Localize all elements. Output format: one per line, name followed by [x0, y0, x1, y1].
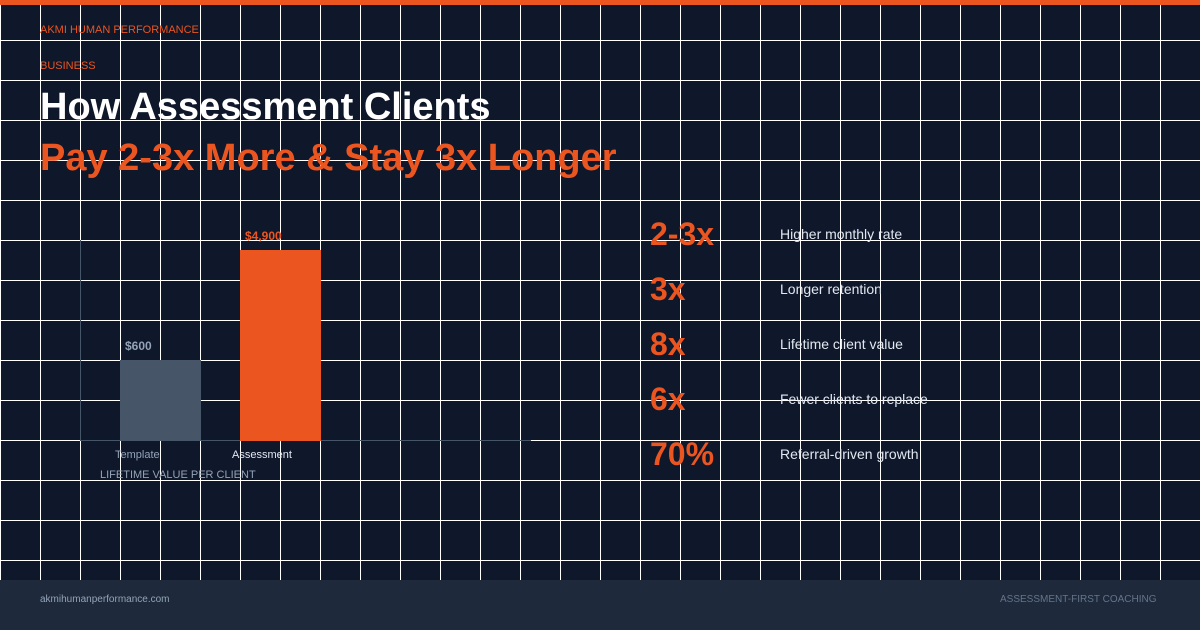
stat numbers and labels: 70%: [650, 436, 714, 472]
stat numbers and labels: Referral-driven growth: [780, 446, 918, 462]
eyebrow: category: BUSINESS: [40, 60, 96, 72]
footer bar: [0, 580, 1200, 630]
bar: assessment: [240, 250, 321, 441]
bar chart: [80, 229, 531, 481]
stat numbers and labels: 6x: [650, 381, 686, 417]
value: template: $600: [125, 339, 152, 353]
chart caption: LIFETIME VALUE PER CLIENT: [100, 469, 256, 481]
footer tagline: ASSESSMENT-FIRST COACHING: [1000, 594, 1157, 605]
eyebrow: brand name: AKMI HUMAN PERFORMANCE: [40, 24, 199, 36]
stat numbers and labels: Higher monthly rate: [780, 226, 902, 242]
label: assessment: Assessment: [232, 449, 292, 461]
title line 1: How Assessment Clients: [40, 86, 491, 128]
stat list: [650, 216, 928, 472]
stat numbers and labels: Lifetime client value: [780, 336, 903, 352]
footer website: akmihumanperformance.com: [40, 594, 170, 605]
stat numbers and labels: 3x: [650, 271, 686, 307]
y axis: [80, 240, 81, 441]
title line 2: Pay 2-3x More & Stay 3x Longer: [40, 137, 617, 179]
stat numbers and labels: 8x: [650, 326, 686, 362]
label: template: Template: [115, 449, 160, 461]
stat numbers and labels: Longer retention: [780, 281, 882, 297]
top accent bar: [0, 0, 1200, 5]
stat numbers and labels: 2-3x: [650, 216, 714, 252]
stat numbers and labels: Fewer clients to replace: [780, 391, 928, 407]
value: assessment: $4,900: [245, 229, 282, 243]
x axis: [80, 440, 531, 441]
bar: template: [120, 360, 201, 441]
